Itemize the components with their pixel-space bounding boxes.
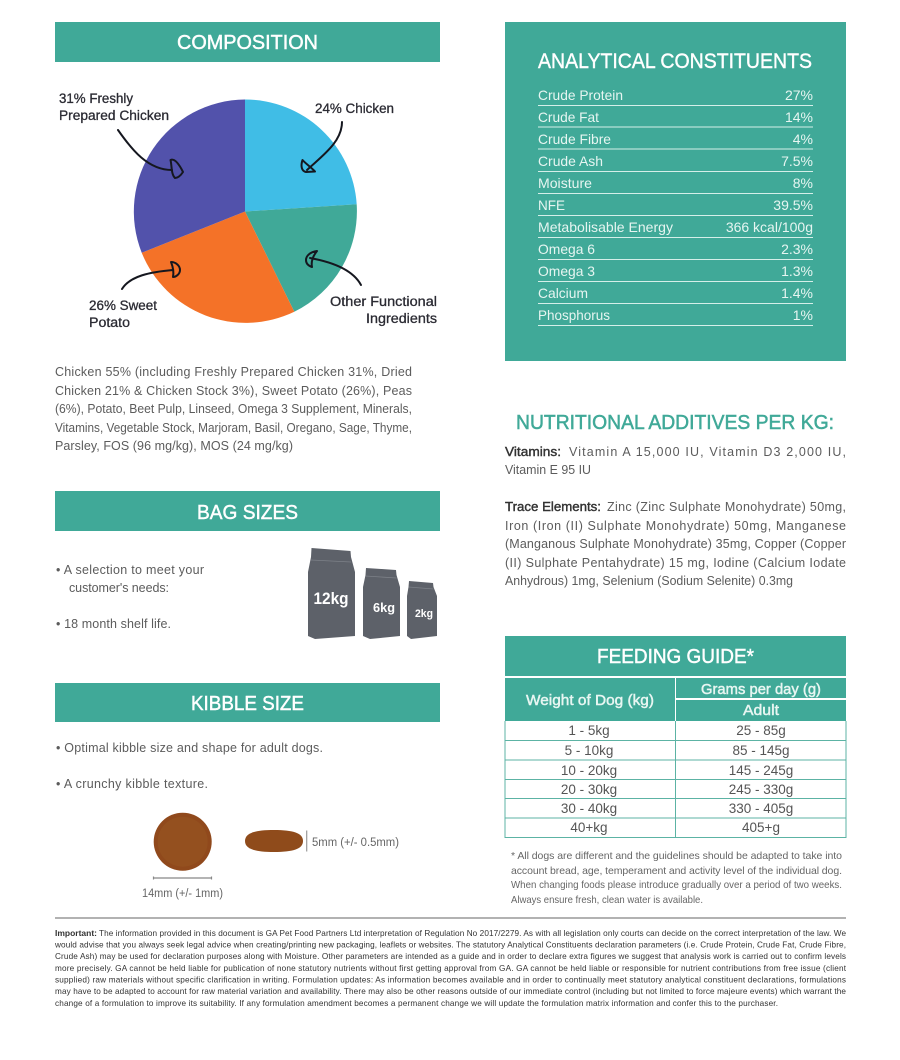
- table: feeding guide: 5 - 10kg: [565, 743, 613, 758]
- heading: feeding guide: FEEDING GUIDE*: [597, 646, 754, 668]
- label: sweet potato: [89, 298, 157, 330]
- table: constituent rows: 1%: [793, 307, 813, 323]
- table: constituent rows: Omega 6: [538, 241, 595, 257]
- text: legal disclaimer: more precisely. GA cannot be held liable for publication of none statutory nutrients without first getting approval from GA. GA cannot be held liable or responsible for nutrient contributions from free issue (client: [55, 964, 847, 973]
- text: ingredient list: [55, 365, 412, 453]
- table: constituent rows: Phosphorus: [538, 307, 610, 323]
- table: constituent rows: 7.5%: [781, 153, 813, 169]
- table: feeding guide: 10 - 20kg: [561, 763, 617, 778]
- table: feeding guide: 1 - 5kg: [568, 723, 610, 738]
- text: feeding guide note: * All dogs are different and the guidelines should be adapted to take into: [511, 850, 842, 862]
- text: vitamins: Vitamins:: [505, 445, 561, 459]
- label: freshly prepared chicken: [59, 91, 169, 123]
- text: feeding guide note: account bread, age, temperament and activity level of the individual dog.: [511, 865, 842, 877]
- panel: bag sizes: [55, 491, 440, 639]
- text: trace elements: Trace Elements:: [505, 500, 601, 514]
- dimension: kibble diameter: 14mm (+/- 1mm): [142, 888, 223, 900]
- arrow: other functional ingredients: [306, 251, 361, 285]
- label: freshly prepared chicken: 31% Freshly: [59, 91, 133, 106]
- text: trace elements: (Manganous Sulphate Monohydrate) 35mg, Copper (Copper: [505, 537, 846, 551]
- text: trace elements: (II) Sulphate Pentahydrate) 15 mg, Iodine (Calcium Iodate: [505, 556, 846, 570]
- text: legal disclaimer: [54, 918, 847, 1008]
- table: constituent rows: [538, 87, 813, 326]
- arrow: sweet potato: [122, 262, 180, 289]
- icon: 2kg bag: 2kg: [415, 608, 433, 620]
- table: constituent rows: Metabolisable Energy: [538, 219, 673, 235]
- dimension: kibble diameter: [142, 876, 223, 900]
- arrow: chicken: [302, 122, 342, 172]
- text: trace elements: Iron (Iron (II) Sulphate Monohydrate) 50mg, Manganese: [505, 519, 846, 533]
- text: ingredient list: (6%), Potato, Beet Pulp, Linseed, Omega 3 Supplement, Minerals,: [55, 402, 412, 416]
- text: trace elements: Anhydrous) 1mg, Selenium (Sodium Selenite) 0.3mg: [505, 574, 793, 588]
- text: bag size bullets: customer's needs:: [69, 581, 169, 595]
- label: sweet potato: 26% Sweet: [89, 298, 157, 313]
- icon: 12kg bag: 12kg: [314, 589, 348, 608]
- icon: 6kg bag: 6kg: [373, 600, 395, 615]
- text: legal disclaimer: change of a formulation to improve its suitability. If any formulation amendment becomes a permanent change we will update the formulation matrix information and confer this to the purchaser.: [55, 999, 778, 1008]
- table: feeding guide: Weight of Dog (kg): [526, 693, 654, 709]
- table: constituent rows: 14%: [785, 109, 813, 125]
- text: ingredient list: Chicken 21% & Chicken Stock 3%), Sweet Potato (26%), Peas: [55, 384, 412, 398]
- label: other functional ingredients: Other Functional: [330, 294, 437, 309]
- table: constituent rows: 39.5%: [773, 197, 813, 213]
- text: vitamins: Vitamin E 95 IU: [505, 463, 591, 477]
- pie chart: composition: [134, 100, 357, 323]
- heading: feeding guide: [505, 636, 846, 676]
- panel: feeding guide: [505, 636, 846, 906]
- label: sweet potato: Potato: [89, 315, 130, 330]
- text: kibble bullets: • A crunchy kibble texture.: [56, 777, 208, 791]
- table: feeding guide: 405+g: [742, 820, 780, 835]
- table: constituent rows: Moisture: [538, 175, 592, 191]
- table: constituent rows: 2.3%: [781, 241, 813, 257]
- table: constituent rows: Omega 3: [538, 263, 595, 279]
- text: bag size bullets: [56, 563, 204, 631]
- text: feeding guide note: Always ensure fresh, clean water is available.: [511, 894, 703, 906]
- table: feeding guide: Adult: [743, 703, 779, 719]
- label: freshly prepared chicken: Prepared Chicken: [59, 108, 169, 123]
- text: legal disclaimer: Important:: [55, 929, 97, 938]
- table: feeding guide: Grams per day (g): [701, 682, 821, 698]
- arrow: freshly prepared chicken: [118, 130, 183, 178]
- heading: composition: [55, 22, 440, 62]
- icon: 6kg bag: [363, 568, 400, 639]
- table: feeding guide: 85 - 145g: [732, 743, 790, 758]
- heading: composition: COMPOSITION: [177, 32, 318, 54]
- icon: kibble top view: [154, 813, 212, 871]
- table: feeding guide: [505, 678, 846, 838]
- table: constituent rows: NFE: [538, 197, 565, 213]
- text: kibble bullets: • Optimal kibble size and shape for adult dogs.: [56, 741, 323, 755]
- table: constituent rows: Crude Fat: [538, 109, 599, 125]
- table: constituent rows: Crude Protein: [538, 87, 623, 103]
- table: feeding guide: 145 - 245g: [729, 763, 793, 778]
- table: feeding guide: 330 - 405g: [729, 801, 793, 816]
- label: other functional ingredients: [330, 294, 437, 326]
- text: ingredient list: Vitamins, Vegetable Stock, Marjoram, Basil, Oregano, Sage, Thyme,: [55, 421, 412, 435]
- text: feeding guide note: When changing foods please introduce gradually over a period of two weeks.: [511, 879, 842, 891]
- text: legal disclaimer: may have to be adapted to account for raw material variation and availability. There may also be other reasons outside of our immediate control (including but not limited to force majeure events) which warrant the: [55, 987, 846, 996]
- panel: nutritional additives: [505, 412, 846, 588]
- heading: kibble size: [55, 683, 440, 722]
- label: chicken: 24% Chicken: [315, 101, 394, 116]
- table: constituent rows: 1.4%: [781, 285, 813, 301]
- label: other functional ingredients: Ingredients: [366, 311, 437, 326]
- table: constituent rows: 1.3%: [781, 263, 813, 279]
- text: feeding guide note: [511, 850, 842, 906]
- text: legal disclaimer: supplied) raw materials without specific clarification in writing. Formulation updates: As information becomes available and in order to continually meet statutory analytical constituent declarations, formulations: [55, 976, 846, 984]
- text: vitamins: Vitamin A 15,000 IU, Vitamin D3 2,000 IU,: [569, 445, 846, 459]
- icon: 2kg bag: [407, 581, 437, 639]
- table: feeding guide: 25 - 85g: [736, 723, 786, 738]
- text: legal disclaimer: would advise that you always seek legal advice when creating/printing new packaging, leaflets or websites. The statutory Analytical Constituents declaration parameters (i.e. Crude Protein, Crude Fat, Crude Fibre,: [54, 940, 846, 950]
- icon: 12kg bag: [308, 548, 355, 639]
- dimension: kibble height: [307, 830, 399, 852]
- text: trace elements: Zinc (Zinc Sulphate Monohydrate) 50mg,: [607, 500, 846, 514]
- table: feeding guide: 40+kg: [570, 820, 608, 835]
- table: constituent rows: 27%: [785, 87, 813, 103]
- text: vitamins: [505, 445, 846, 477]
- table: constituent rows: Crude Ash: [538, 153, 603, 169]
- text: legal disclaimer: The information provided in this document is GA Pet Food Partners Ltd interpretation of Regulation No 2017/2279. As with all legislation only courts can decide on the correct interpretation of the law. We: [99, 929, 846, 938]
- heading: analytical constituents: ANALYTICAL CONSTITUENTS: [538, 50, 812, 73]
- heading: nutritional additives: NUTRITIONAL ADDITIVES PER KG:: [516, 412, 834, 434]
- table: constituent rows: Crude Fibre: [538, 131, 611, 147]
- panel: composition: [55, 22, 440, 453]
- text: ingredient list: Parsley, FOS (96 mg/kg), MOS (24 mg/kg): [55, 439, 293, 453]
- heading: bag sizes: [55, 491, 440, 531]
- table: constituent rows: 366 kcal/100g: [726, 219, 813, 235]
- heading: kibble size: KIBBLE SIZE: [191, 693, 304, 715]
- text: bag size bullets: • 18 month shelf life.: [56, 617, 171, 631]
- table: constituent rows: 8%: [793, 175, 813, 191]
- icon: kibble side view: [245, 830, 303, 852]
- text: bag size bullets: • A selection to meet your: [56, 563, 204, 577]
- heading: bag sizes: BAG SIZES: [197, 502, 298, 524]
- table: feeding guide: 30 - 40kg: [561, 801, 617, 816]
- text: ingredient list: Chicken 55% (including Freshly Prepared Chicken 31%, Dried: [55, 365, 412, 379]
- panel: kibble size: [55, 683, 440, 900]
- text: legal disclaimer: Crude Ash) may be used for declaration purposes along with Moisture. Other parameters are intended as a guide and in order to declare extra figures we suggest that analysis work is carried out to confirm levels: [55, 952, 846, 961]
- table: constituent rows: 4%: [793, 131, 813, 147]
- text: kibble bullets: [56, 741, 323, 791]
- table: feeding guide: 245 - 330g: [729, 782, 793, 797]
- table: feeding guide: 20 - 30kg: [561, 782, 617, 797]
- panel: analytical constituents: [505, 22, 846, 361]
- text: trace elements: [505, 500, 846, 588]
- table: constituent rows: Calcium: [538, 285, 588, 301]
- dimension: kibble height: 5mm (+/- 0.5mm): [312, 837, 399, 849]
